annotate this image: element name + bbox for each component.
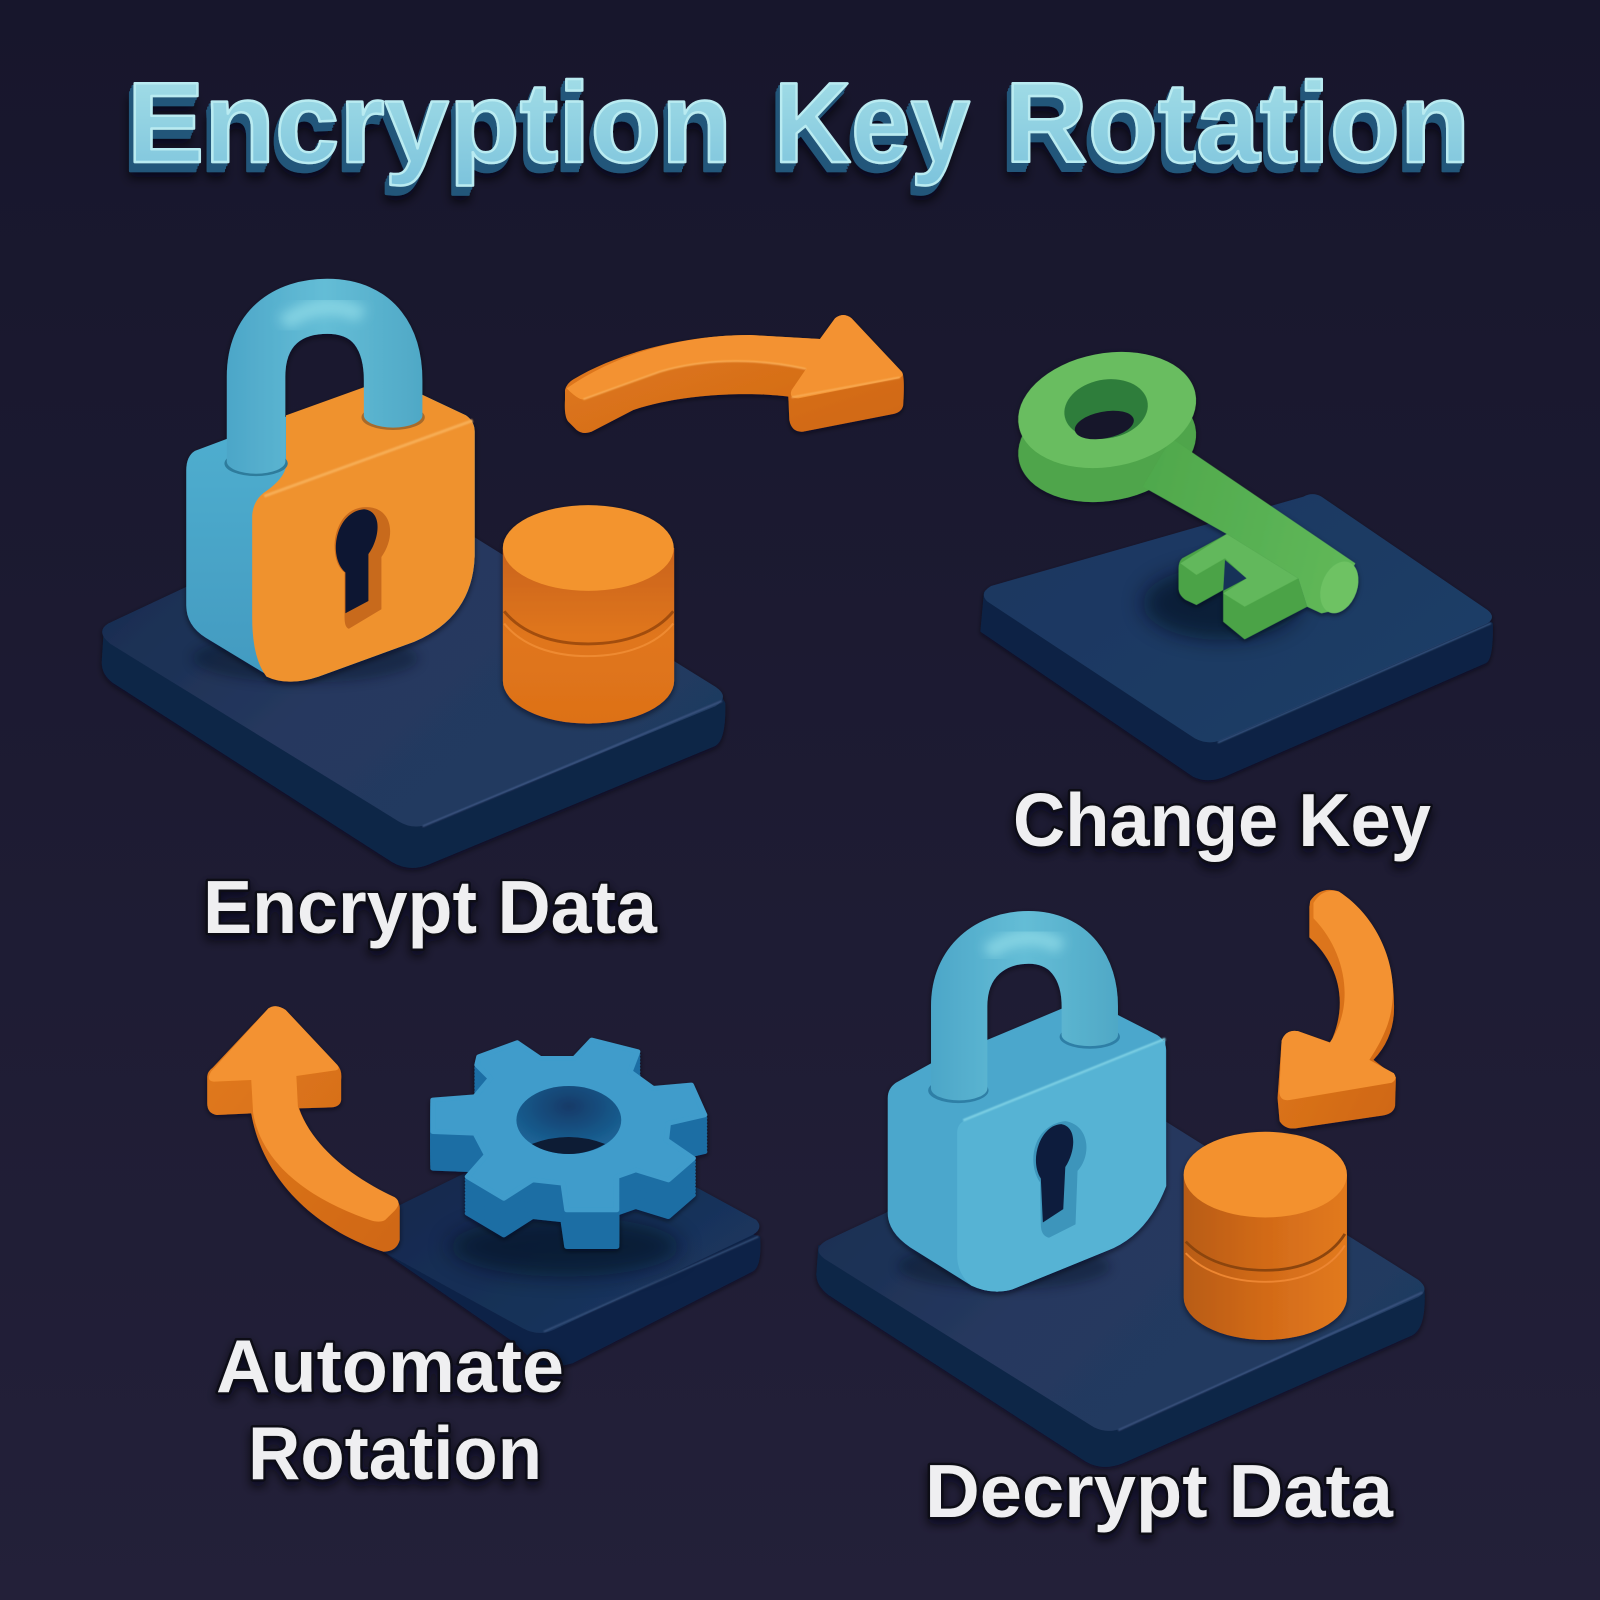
label: automate rotation: Rotation [248, 1411, 542, 1495]
label: change key: Change Key [1013, 778, 1431, 862]
database cylinder [503, 505, 674, 724]
panel: decrypt data [816, 937, 1425, 1467]
database cylinder [1184, 1132, 1347, 1340]
arrow: change key to decrypt [1278, 890, 1396, 1129]
panel: encrypt data [102, 306, 725, 868]
label: encrypt data: Encrypt Data [203, 865, 658, 949]
key [1006, 337, 1365, 639]
label: automate rotation: Automate [216, 1324, 564, 1408]
label: decrypt data: Decrypt Data [925, 1449, 1394, 1533]
arrow: encrypt to change key [565, 315, 904, 433]
platform: change key [980, 494, 1493, 780]
padlock: orange and blue [186, 306, 475, 682]
title: Key [774, 60, 970, 187]
title: Rotation [1005, 60, 1470, 187]
arrow: automate to encrypt [207, 1006, 400, 1252]
gear icon [433, 1040, 705, 1247]
platform: encrypt data [102, 489, 725, 868]
platform: automate rotation [383, 1120, 760, 1370]
title: Encryption [127, 60, 732, 187]
padlock: blue [888, 937, 1166, 1292]
title [127, 60, 1470, 187]
panel: change key [980, 337, 1493, 780]
label: automate rotation [216, 1324, 564, 1495]
platform: decrypt data [816, 1071, 1425, 1467]
panel: automate rotation [383, 1040, 760, 1370]
